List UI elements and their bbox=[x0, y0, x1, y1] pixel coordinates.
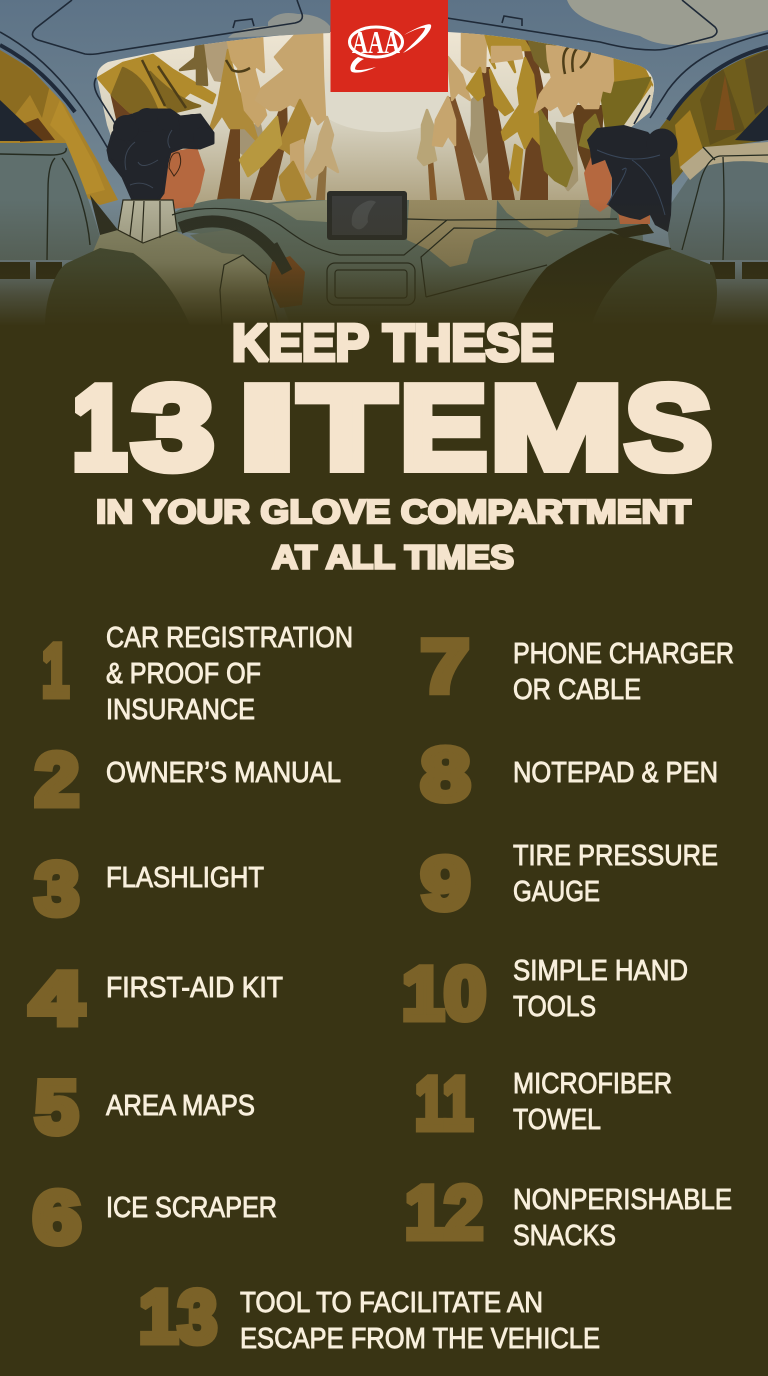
background panel bbox=[0, 325, 768, 1376]
left side window bbox=[0, 50, 118, 205]
logo: AAA bbox=[330, 0, 448, 92]
item 10 bbox=[402, 952, 688, 1035]
left seat back bbox=[45, 248, 192, 330]
left canopy bbox=[98, 45, 215, 114]
tree detail lines bbox=[142, 46, 590, 108]
trunks bbox=[110, 38, 604, 200]
passenger face bbox=[584, 157, 612, 212]
center screen bbox=[327, 191, 407, 240]
dash reflections bbox=[407, 200, 612, 267]
far tan tree right bbox=[418, 110, 438, 200]
item 3 bbox=[35, 847, 264, 930]
item 11 bbox=[415, 1062, 672, 1145]
item 12: NONPERISHABLE bbox=[513, 1184, 732, 1216]
driver collar bbox=[118, 200, 177, 243]
dashboard lines bbox=[172, 208, 617, 305]
item 9: 9 bbox=[421, 842, 470, 925]
item 7: OR CABLE bbox=[513, 674, 641, 706]
item 9: GAUGE bbox=[513, 876, 600, 908]
heading line: at all times: AT ALL TIMES bbox=[272, 540, 514, 577]
item 13 bbox=[139, 1275, 600, 1358]
heading line: 13 items: 3 bbox=[132, 362, 214, 494]
item 1: CAR REGISTRATION bbox=[106, 622, 353, 654]
heading line: keep these bbox=[232, 314, 554, 372]
item 1 bbox=[42, 622, 353, 726]
driver hair bbox=[107, 108, 213, 200]
pillar dark edges bbox=[0, 45, 75, 112]
right seat back bbox=[590, 249, 717, 330]
left headrest and seat bbox=[0, 143, 102, 279]
driver ear bbox=[169, 153, 181, 176]
illustration: car interior and forest bbox=[0, 0, 768, 330]
cream corner bbox=[639, 76, 654, 121]
item 11: TOWEL bbox=[513, 1104, 601, 1136]
item 2: OWNER’S MANUAL bbox=[106, 757, 341, 789]
item 3: FLASHLIGHT bbox=[106, 862, 264, 894]
heading line: 13 items: I bbox=[238, 362, 296, 494]
item 6: 6 bbox=[33, 1176, 81, 1259]
right seat and headrest bbox=[668, 142, 768, 279]
driver neck and face bbox=[160, 147, 205, 210]
title bbox=[72, 314, 712, 577]
item 12: SNACKS bbox=[513, 1220, 616, 1252]
heading line: 13 items: S bbox=[625, 362, 712, 494]
item 10: SIMPLE HAND bbox=[513, 955, 688, 987]
item 1: & PROOF OF bbox=[106, 658, 261, 690]
item 9 bbox=[421, 840, 718, 925]
passenger collar bbox=[611, 223, 654, 238]
item 4 bbox=[30, 957, 283, 1040]
heading line: in your glove compartment: IN YOUR GLOVE COMPARTMENT bbox=[96, 494, 692, 531]
driver hair curls bbox=[125, 130, 172, 188]
bottom fade bbox=[0, 200, 768, 330]
back grey boughs bbox=[203, 38, 230, 82]
item 8: 8 bbox=[421, 733, 470, 816]
item 2: 2 bbox=[35, 738, 79, 821]
item 7: 7 bbox=[421, 625, 469, 708]
heading line: 13 items: M bbox=[490, 362, 623, 494]
item 6 bbox=[33, 1176, 277, 1259]
item 3: 3 bbox=[35, 847, 79, 930]
item 7 bbox=[421, 625, 734, 708]
large tan boughs bbox=[256, 33, 325, 124]
windshield forest bbox=[90, 28, 660, 208]
right gold boughs bbox=[485, 33, 530, 72]
heading line: keep these: KEEP bbox=[232, 314, 369, 372]
item 5 bbox=[35, 1066, 255, 1149]
driver sweater bbox=[60, 228, 280, 330]
item 13: 13 bbox=[139, 1275, 217, 1358]
item 1: INSURANCE bbox=[106, 694, 255, 726]
item 12 bbox=[405, 1171, 732, 1254]
right corner canopy bbox=[599, 54, 654, 103]
gold fir centre left bbox=[208, 50, 258, 142]
dark gap behind driver bbox=[90, 195, 122, 235]
item 9: TIRE PRESSURE bbox=[513, 840, 718, 872]
item 8: NOTEPAD & PEN bbox=[513, 757, 718, 789]
dashboard bbox=[173, 199, 650, 330]
heading line: 13 items: E bbox=[400, 362, 487, 494]
heading line: 13 items bbox=[72, 362, 712, 494]
driver hand bbox=[268, 256, 305, 308]
item 11: MICROFIBER bbox=[513, 1068, 672, 1100]
heading line: 13 items: 1 bbox=[72, 362, 127, 494]
item 5: AREA MAPS bbox=[106, 1090, 255, 1122]
passenger hair and bun bbox=[587, 125, 678, 232]
item 10: TOOLS bbox=[513, 991, 596, 1023]
right tan boughs bbox=[448, 57, 470, 100]
item 7: PHONE CHARGER bbox=[513, 638, 734, 670]
big tan hand bough bbox=[535, 46, 613, 116]
far tan tree left bbox=[306, 117, 338, 200]
passenger neck bbox=[617, 205, 650, 224]
roof light patch bbox=[567, 0, 768, 45]
collar stripes bbox=[130, 201, 160, 242]
passenger hair strands bbox=[597, 150, 665, 215]
item 8 bbox=[421, 733, 718, 816]
item 11: 11 bbox=[415, 1062, 473, 1145]
item 13: ESCAPE FROM THE VEHICLE bbox=[240, 1323, 600, 1355]
logo: AAA: AAA bbox=[352, 24, 400, 60]
heading line: 13 items: T bbox=[299, 362, 395, 494]
heading line: keep these: THESE bbox=[383, 314, 554, 372]
item 13: TOOL TO FACILITATE AN bbox=[240, 1287, 543, 1319]
item 4: 4 bbox=[30, 957, 83, 1040]
item 6: ICE SCRAPER bbox=[106, 1192, 277, 1224]
item 5: 5 bbox=[35, 1066, 78, 1149]
item 2 bbox=[35, 738, 341, 821]
item 1: 1 bbox=[42, 629, 69, 712]
passenger body bbox=[505, 233, 680, 330]
item 10: 10 bbox=[402, 952, 486, 1035]
wheel grip bbox=[272, 245, 287, 272]
roof cloud reflection bbox=[228, 13, 330, 38]
item 4: FIRST-AID KIT bbox=[106, 972, 283, 1004]
item 12: 12 bbox=[405, 1171, 483, 1254]
steering wheel bbox=[180, 221, 287, 272]
inner wheel bbox=[190, 228, 275, 300]
right side window bbox=[660, 50, 768, 186]
roof lines bbox=[0, 0, 768, 195]
